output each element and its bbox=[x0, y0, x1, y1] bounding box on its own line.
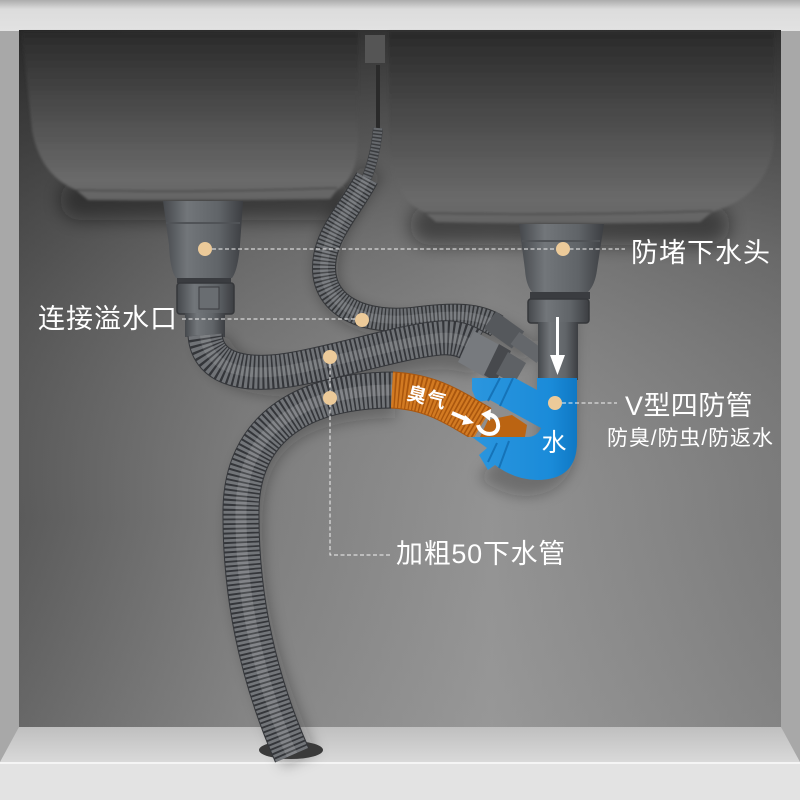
left strainer drain head bbox=[163, 201, 243, 337]
overflow hose bbox=[324, 65, 541, 357]
label: overflow connection: 连接溢水口 bbox=[38, 304, 178, 334]
marker dots bbox=[198, 242, 570, 410]
pipe shadows bbox=[212, 170, 558, 760]
label: anti-clog drain head: 防堵下水头 bbox=[631, 238, 771, 268]
dashed leader lines bbox=[182, 249, 625, 555]
orange odour hose bbox=[392, 390, 527, 437]
overflow connection hose bbox=[205, 335, 474, 372]
right sink bowl bbox=[389, 32, 774, 224]
water label: 水 bbox=[541, 429, 567, 457]
floor hole bbox=[259, 741, 323, 759]
odour blocked arrow bbox=[452, 409, 498, 434]
cabinet floor and front lip bbox=[0, 727, 800, 800]
right strainer drain head bbox=[519, 224, 604, 323]
hose connector nut bbox=[458, 331, 526, 384]
label: trap benefits: 防臭/防虫/防返水 bbox=[607, 427, 774, 450]
odour label: 臭气 bbox=[405, 382, 449, 414]
label: thick drain hose: 加粗50下水管 bbox=[396, 539, 566, 569]
vertical tailpiece bbox=[538, 322, 578, 380]
label: V trap: V型四防管 bbox=[625, 391, 753, 421]
left sink bowl bbox=[22, 32, 358, 200]
V trap blue water section bbox=[472, 378, 577, 480]
down flow arrow bbox=[550, 317, 565, 375]
sink shadows bbox=[60, 180, 730, 245]
divider between sinks bbox=[365, 35, 385, 63]
thick 50 drain hose bbox=[241, 390, 394, 755]
